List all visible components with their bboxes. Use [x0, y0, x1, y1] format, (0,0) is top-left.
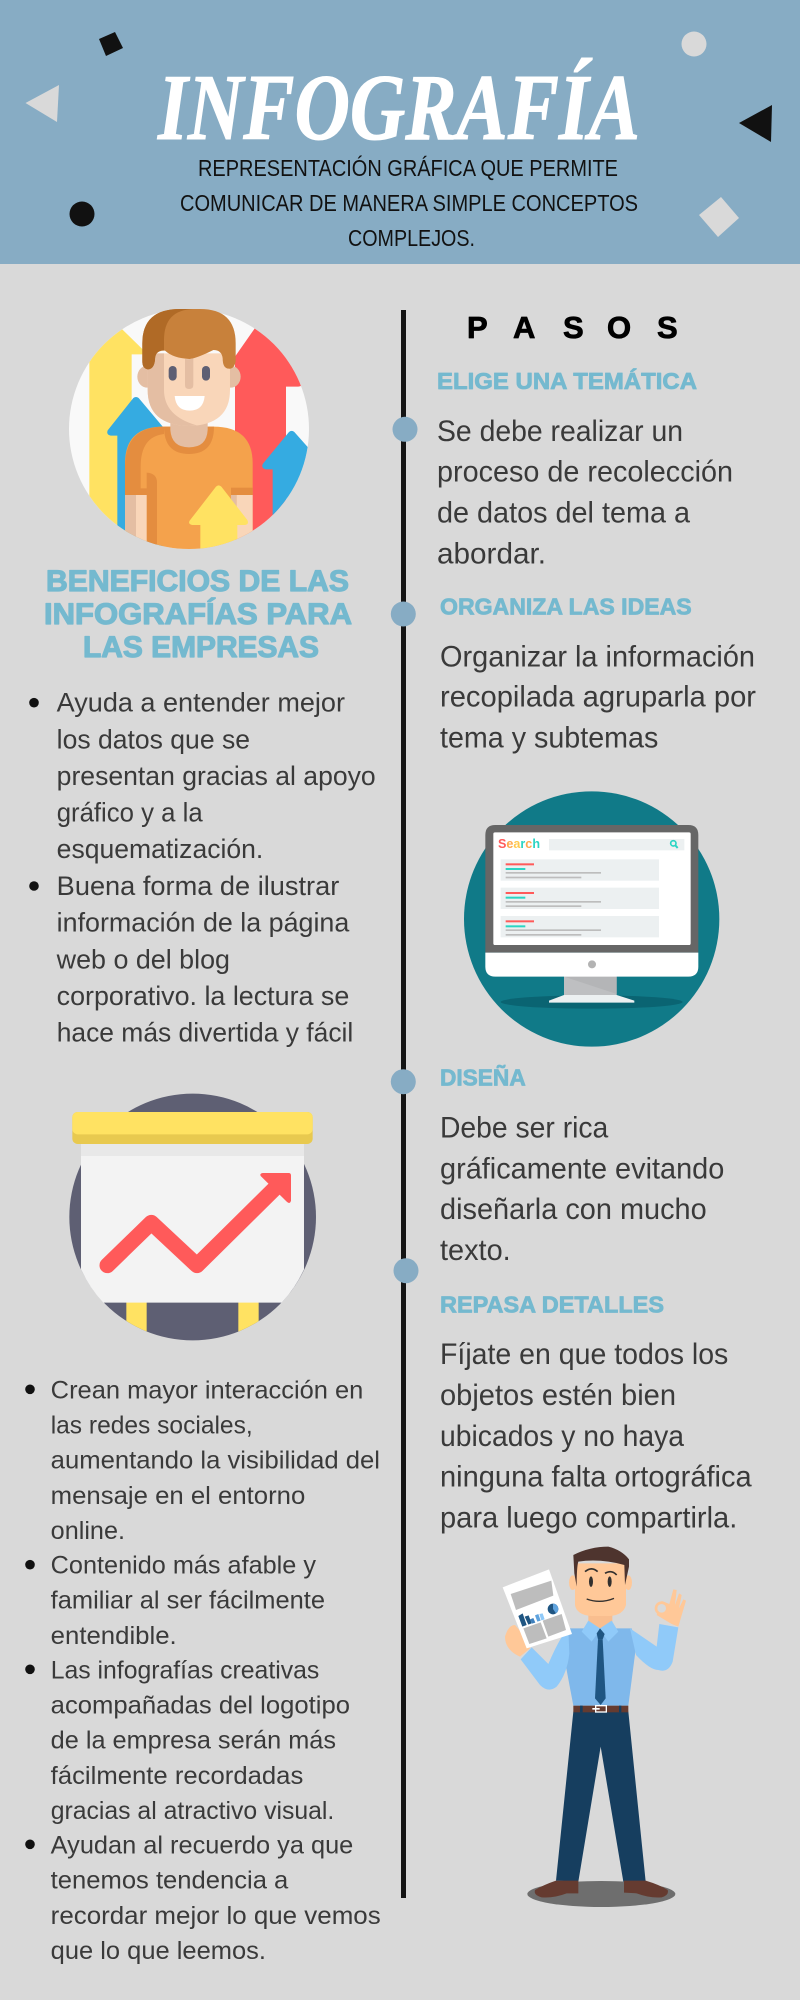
icon: businessman holding document: [503, 1547, 686, 1907]
icon: monitor with search page: Search: [498, 836, 540, 851]
list: benefits part two: acompañadas del logotipo: [51, 1691, 350, 1719]
list: benefits part two: [25, 1376, 381, 1965]
step 2 heading: ORGANIZA LAS IDEAS: [440, 593, 692, 619]
list: benefits part two: fácilmente recordadas: [51, 1762, 303, 1790]
heading: benefits: [44, 565, 352, 664]
timeline line: [401, 310, 406, 1898]
subtitle: COMUNICAR DE MANERA SIMPLE CONCEPTOS: [180, 190, 638, 216]
shape: black triangle: [739, 105, 772, 142]
step 1 text: Se debe realizar un: [437, 415, 683, 448]
timeline dot 1: [392, 417, 418, 442]
step 3 text: Debe ser rica: [440, 1111, 609, 1144]
heading: benefits: INFOGRAFÍAS PARA: [44, 597, 352, 631]
header banner: [0, 0, 800, 264]
shape: grey circle: [682, 32, 706, 56]
step 1 text: proceso de recolección: [437, 456, 733, 489]
timeline dot 2: [391, 602, 416, 626]
step 3 heading: DISEÑA: [440, 1064, 526, 1091]
step 4: [440, 1291, 752, 1535]
step 3: [440, 1064, 724, 1267]
heading: benefits: BENEFICIOS DE LAS: [46, 565, 349, 598]
list: benefits part two: de la empresa serán más: [51, 1726, 336, 1754]
list: benefits part two: aumentando la visibilidad del: [51, 1446, 380, 1474]
list: benefits part two: que lo que leemos.: [51, 1937, 266, 1965]
step 1: [437, 367, 733, 570]
list: benefits part two: online.: [51, 1517, 125, 1545]
step 2 text: recopilada agruparla por: [440, 681, 756, 714]
step 2 text: [440, 641, 756, 755]
timeline dot 3: [391, 1069, 416, 1094]
step 3 text: texto.: [440, 1234, 511, 1267]
list: benefits part one: corporativo. la lectura se: [57, 981, 349, 1011]
shape: grey triangle: [26, 85, 59, 122]
step 2 text: Organizar la información: [440, 641, 755, 674]
list: benefits part one: los datos que se: [57, 724, 250, 754]
list: benefits part one: información de la página: [57, 908, 350, 938]
list: benefits part two: Contenido más afable y: [51, 1551, 316, 1579]
icon: man with rising arrows: [69, 309, 313, 553]
icon: presentation board with rising chart: [69, 1094, 316, 1340]
timeline dot 4: [394, 1258, 418, 1283]
step 1 heading: ELIGE UNA TEMÁTICA: [437, 367, 697, 394]
heading: benefits: LAS EMPRESAS: [83, 631, 319, 664]
list: benefits part one: Ayuda a entender mejor: [57, 688, 345, 718]
list: benefits part two: mensaje en el entorno: [51, 1482, 305, 1510]
shape: black circle: [70, 202, 94, 226]
step 3 text: [440, 1111, 724, 1267]
subtitle: [180, 155, 638, 251]
step 2 text: tema y subtemas: [440, 722, 658, 755]
list: benefits part two: recordar mejor lo que vemos: [51, 1902, 381, 1930]
step 4 heading: REPASA DETALLES: [440, 1291, 664, 1317]
step 1 text: [437, 415, 733, 570]
icon: monitor with search page: [464, 791, 719, 1047]
list: benefits part one: gráfico y a la: [57, 797, 203, 827]
step 4 text: para luego compartirla.: [440, 1502, 737, 1535]
step 4 text: ninguna falta ortográfica: [440, 1461, 752, 1494]
list: benefits part one: web o del blog: [56, 944, 230, 974]
step 1 text: de datos del tema a: [437, 496, 691, 530]
step 3 text: diseñarla con mucho: [440, 1193, 707, 1226]
list: benefits part one: [29, 688, 376, 1048]
step 4 text: objetos estén bien: [440, 1379, 676, 1412]
list: benefits part two: Las infografías creativas: [51, 1656, 319, 1684]
step 4 text: [440, 1338, 752, 1535]
list: benefits part one: presentan gracias al apoyo: [57, 761, 376, 791]
step 2: [440, 593, 756, 755]
shape: grey diamond: [699, 197, 739, 237]
list: benefits part two: Crean mayor interacción en: [51, 1376, 363, 1404]
list: benefits part two: Ayudan al recuerdo ya que: [51, 1831, 353, 1859]
step 4 text: ubicados y no haya: [440, 1420, 685, 1453]
list: benefits part two: entendible.: [51, 1622, 177, 1650]
subtitle: REPRESENTACIÓN GRÁFICA QUE PERMITE: [198, 155, 618, 181]
heading: pasos: PASOS: [467, 310, 678, 345]
step 3 text: gráficamente evitando: [440, 1152, 724, 1185]
list: benefits part two: familiar al ser fácilmente: [51, 1587, 325, 1615]
shape: black diamond: [99, 32, 123, 56]
list: benefits part one: Buena forma de ilustrar: [57, 871, 339, 901]
list: benefits part two: las redes sociales,: [51, 1411, 253, 1439]
list: benefits part two: tenemos tendencia a: [51, 1866, 288, 1894]
step 1 text: abordar.: [437, 538, 546, 570]
subtitle: COMPLEJOS.: [348, 225, 475, 251]
list: benefits part two: gracias al atractivo visual.: [51, 1797, 334, 1825]
step 4 text: Fíjate en que todos los: [440, 1338, 728, 1371]
list: benefits part one: esquematización.: [57, 834, 263, 864]
list: benefits part one: hace más divertida y fácil: [57, 1018, 353, 1048]
title: INFOGRAFÍA: [157, 56, 640, 160]
